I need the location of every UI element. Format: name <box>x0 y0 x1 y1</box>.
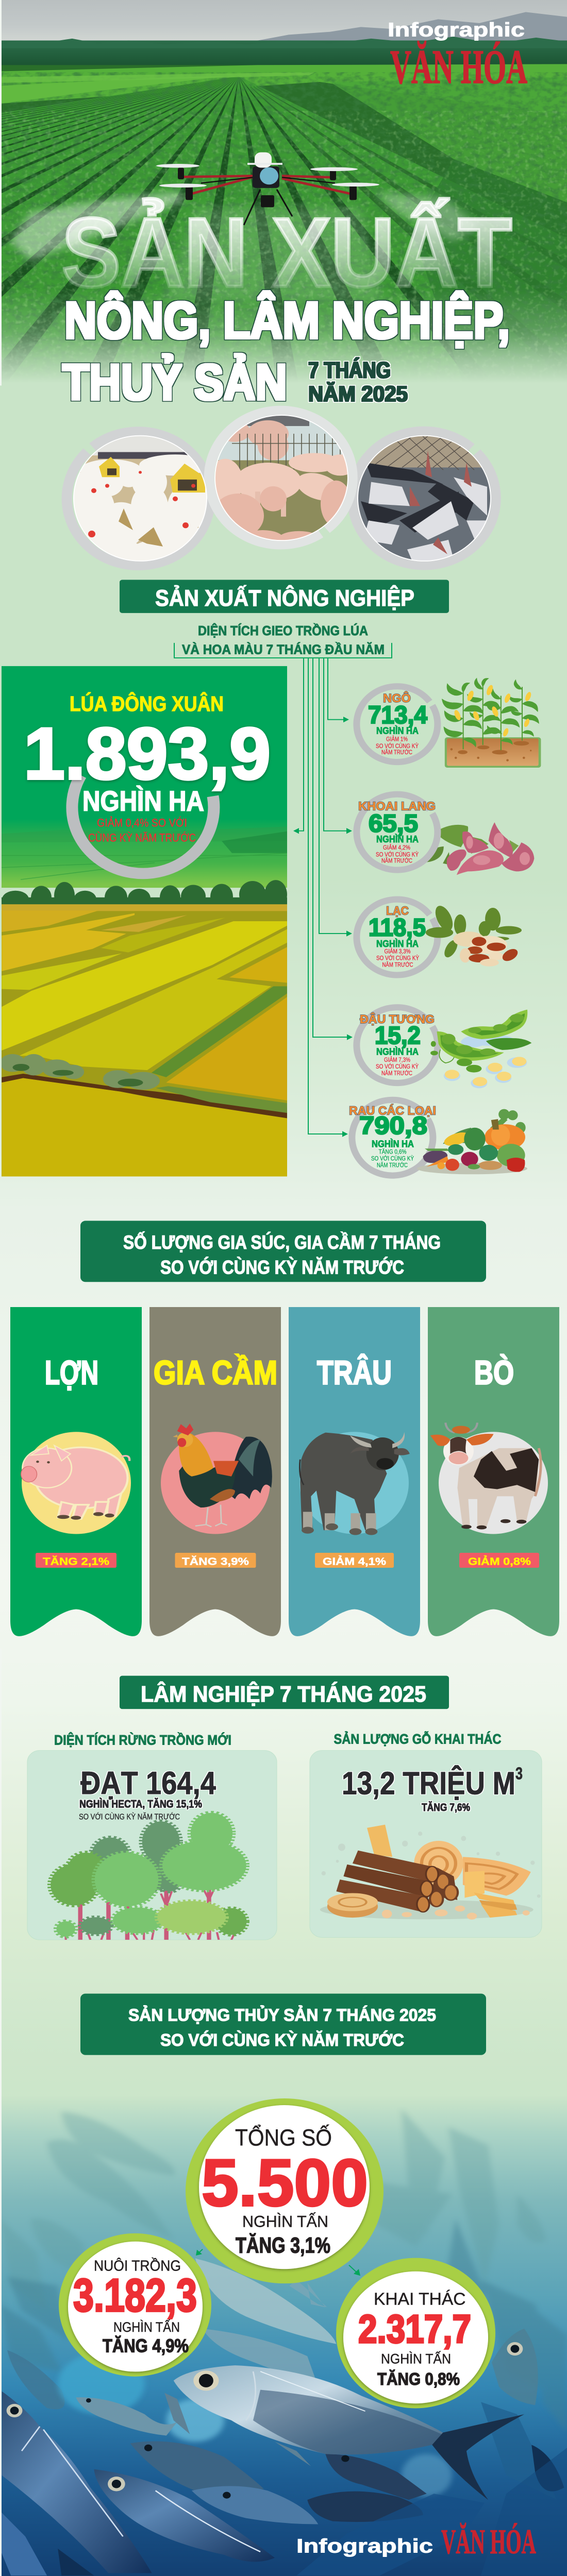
change tag <box>36 1553 116 1568</box>
icon: rooster <box>173 1423 272 1527</box>
crop: vegetables <box>349 1100 527 1176</box>
value: 118,5 <box>369 913 426 941</box>
change tag: TĂNG 2,1% <box>43 1555 109 1567</box>
photo: pigs <box>215 415 347 540</box>
heading: GIA CẦM <box>154 1354 277 1392</box>
unit: NGHÌN TẤN <box>113 2319 180 2335</box>
bright water <box>58 2353 145 2414</box>
heading: BÒ <box>474 1354 514 1392</box>
circle backdrop <box>439 1432 548 1534</box>
section banner: fisheries: SẢN LƯỢNG THỦY SẢN 7 THÁNG 2025 <box>128 2005 436 2025</box>
icon: cow <box>430 1422 541 1529</box>
label: KHAI THÁC <box>374 2289 465 2309</box>
change: TĂNG 7,6% <box>422 1801 470 1814</box>
section banner: livestock: SỐ LƯỢNG GIA SÚC, GIA CẦM 7 THÁNG <box>123 1231 441 1253</box>
panel: new forest area <box>27 1751 277 1940</box>
value: 5.500 <box>202 2146 368 2220</box>
change tag: GIẢM 0,8% <box>468 1555 531 1567</box>
value: ĐẠT 164,4 <box>80 1765 216 1801</box>
icon: peanuts <box>426 903 522 967</box>
change: GIẢM 1% <box>386 735 408 743</box>
circle backdrop <box>22 1432 131 1534</box>
section banner: forestry: LÂM NGHIỆP 7 THÁNG 2025 <box>141 1681 426 1707</box>
change: TĂNG 0,8% <box>377 2369 460 2389</box>
icon: sweet potatoes <box>421 822 534 875</box>
crop name: RAU CÁC LOẠI <box>349 1104 436 1118</box>
heading: LỢN <box>45 1355 98 1392</box>
value: 790,8 <box>359 1111 427 1140</box>
change tag <box>459 1553 539 1568</box>
circle backdrop <box>161 1432 270 1534</box>
ring <box>352 1100 433 1176</box>
change: NĂM TRƯỚC <box>377 1161 408 1169</box>
left long fish <box>2 2392 152 2573</box>
photo: chickens <box>74 436 206 561</box>
change: NĂM TRƯỚC <box>381 1069 412 1077</box>
photo: tree line <box>2 880 287 905</box>
change: SO VỚI CÙNG KỲ <box>376 851 419 858</box>
ribbon: buffalo <box>289 1307 420 1636</box>
label: NUÔI TRỒNG <box>94 2257 181 2274</box>
change note: GIẢM 0,4% SO VỚI <box>97 815 187 829</box>
unit: NGHÌN TẤN <box>381 2351 451 2366</box>
value: 65,5 <box>369 809 418 837</box>
ribbon: pigs <box>10 1307 142 1636</box>
date label <box>308 357 408 406</box>
change: TĂNG 4,9% <box>103 2336 189 2357</box>
label: TỔNG SỐ <box>235 2124 332 2151</box>
change <box>376 735 419 756</box>
circle backdrop <box>299 1432 409 1534</box>
unit: NGHÌN HA <box>376 834 419 845</box>
change <box>376 947 419 968</box>
icon: logs <box>320 1825 541 1920</box>
change note <box>88 815 196 844</box>
title <box>62 198 512 411</box>
photo: rice fields <box>0 666 289 1179</box>
panel: winter-spring rice <box>0 666 289 1179</box>
value: 713,4 <box>368 701 427 729</box>
value: 2.317,7 <box>358 2307 471 2351</box>
change: SO VỚI CÙNG KỲ <box>376 1062 419 1070</box>
value: 15,2 <box>375 1021 421 1049</box>
unit: NGHÌN HA <box>372 1138 414 1149</box>
section banner: fisheries: SO VỚI CÙNG KỲ NĂM TRƯỚC <box>160 2030 404 2050</box>
change note: CÙNG KỲ NĂM TRƯỚC <box>88 831 196 844</box>
unit: NGHÌN HA <box>376 725 419 737</box>
change <box>371 1148 414 1169</box>
change tag <box>175 1553 256 1568</box>
value: 13,2 TRIỆU M <box>342 1765 515 1801</box>
big number: 1.893,9 <box>24 713 271 795</box>
crop name: NGÔ <box>383 691 411 705</box>
unit: NGHÌN HA <box>82 785 204 817</box>
subheading: planted area <box>182 623 385 657</box>
ring <box>357 794 438 870</box>
heading: timber output: SẢN LƯỢNG GỖ KHAI THÁC <box>334 1731 502 1747</box>
section banner: forestry <box>120 1676 449 1709</box>
ribbon: poultry <box>149 1307 281 1636</box>
circle: total <box>186 2098 383 2283</box>
circle ring: chickens <box>67 432 210 566</box>
hero photo: drone spraying crop field <box>0 0 567 436</box>
icon: buffalo <box>299 1432 410 1535</box>
unit and change: NGHÌN HECTA, TĂNG 15,1% <box>79 1798 202 1810</box>
change tag: TĂNG 3,9% <box>182 1555 249 1567</box>
connector lines and arrows <box>174 643 392 1137</box>
crop: soybean <box>357 1007 531 1088</box>
icon: soybeans <box>430 1010 531 1088</box>
change: NĂM TRƯỚC <box>381 857 412 864</box>
comparison note: SO VỚI CÙNG KỲ NĂM TRƯỚC <box>79 1812 180 1821</box>
photo circles <box>67 411 496 569</box>
heading: TRÂU <box>317 1354 392 1392</box>
brand: Infographic VĂN HÓA: Infographic <box>388 19 525 41</box>
date label: 7 THÁNG <box>308 357 391 383</box>
circle: aquaculture <box>59 2233 211 2377</box>
change: NĂM TRƯỚC <box>382 961 413 968</box>
section banner: livestock: SO VỚI CÙNG KỲ NĂM TRƯỚC <box>160 1257 404 1278</box>
ribbon: cattle <box>428 1307 559 1636</box>
crop: sweet potato <box>357 794 534 875</box>
change: SO VỚI CÙNG KỲ <box>376 742 419 750</box>
title line: THUỶ SẢN: THUỶ SẢN <box>62 354 287 411</box>
label: rice type: LÚA ĐÔNG XUÂN <box>70 691 224 716</box>
main fish <box>174 2365 524 2500</box>
circle: capture fisheries <box>336 2258 495 2408</box>
change <box>376 844 419 864</box>
crop name: KHOAI LANG <box>358 800 436 813</box>
heading: new forest area: DIỆN TÍCH RỪNG TRỒNG MỚI <box>54 1732 231 1748</box>
change: SO VỚI CÙNG KỲ <box>371 1155 414 1162</box>
brand footer: Infographic <box>296 2535 433 2557</box>
circle ring: pigs <box>209 411 353 545</box>
section banner: agriculture: SẢN XUẤT NÔNG NGHIỆP <box>155 585 414 611</box>
crop: peanut <box>357 900 522 975</box>
circle ring: fish <box>353 431 496 565</box>
background: fish school <box>0 2096 567 2576</box>
change: NĂM TRƯỚC <box>381 748 412 756</box>
change: SO VỚI CÙNG KỲ <box>376 954 419 961</box>
unit: NGHÌN HA <box>376 1046 419 1058</box>
icon: trees <box>51 1813 246 1940</box>
panel: timber output <box>310 1751 542 1938</box>
change <box>376 1056 419 1077</box>
ring <box>357 900 438 975</box>
icon: drone <box>156 152 379 225</box>
superscript: 3 <box>515 1764 523 1783</box>
date label: NĂM 2025 <box>308 382 408 406</box>
ring <box>357 686 438 762</box>
crop name: ĐẬU TƯƠNG <box>360 1012 435 1026</box>
change: GIẢM 3,3% <box>385 947 411 955</box>
change tag: GIẢM 4,1% <box>323 1555 386 1567</box>
crop name: LẠC <box>386 904 409 918</box>
value: 3.182,3 <box>73 2269 197 2321</box>
brand: Infographic VĂN HÓA <box>388 19 527 93</box>
arrows between circles <box>196 2249 360 2276</box>
subheading: planted area: VÀ HOA MÀU 7 THÁNG ĐẦU NĂM <box>182 641 385 657</box>
small light fish <box>76 2397 177 2436</box>
lower fish <box>94 2469 275 2562</box>
right fish bodies <box>492 2329 538 2405</box>
photo: catfish harvest <box>356 434 495 564</box>
brand footer <box>296 2523 536 2561</box>
icon: pig <box>21 1445 129 1520</box>
change: GIẢM 4,2% <box>383 844 410 851</box>
other eyes <box>7 2342 523 2491</box>
silver fish behind <box>195 2259 336 2344</box>
change: TĂNG 0,6% <box>378 1148 406 1155</box>
section banner: fisheries <box>80 1994 486 2055</box>
ring <box>72 775 214 873</box>
faded upper fish <box>6 2111 542 2280</box>
crop: corn <box>357 676 541 768</box>
section banner: agriculture <box>120 580 449 613</box>
change: TĂNG 3,1% <box>236 2233 330 2258</box>
subheading: planted area: DIỆN TÍCH GIEO TRỒNG LÚA <box>198 623 368 638</box>
change tag <box>315 1553 394 1568</box>
section banner: livestock <box>80 1221 486 1282</box>
unit: NGHÌN HA <box>376 938 419 950</box>
ring <box>357 1007 438 1083</box>
change: GIẢM 7,3% <box>384 1056 410 1063</box>
center fish <box>130 2441 264 2490</box>
spray mist <box>10 192 479 299</box>
icon: corn plants <box>440 676 541 768</box>
icon: vegetables <box>417 1109 527 1174</box>
unit: NGHÌN TẤN <box>242 2212 328 2230</box>
